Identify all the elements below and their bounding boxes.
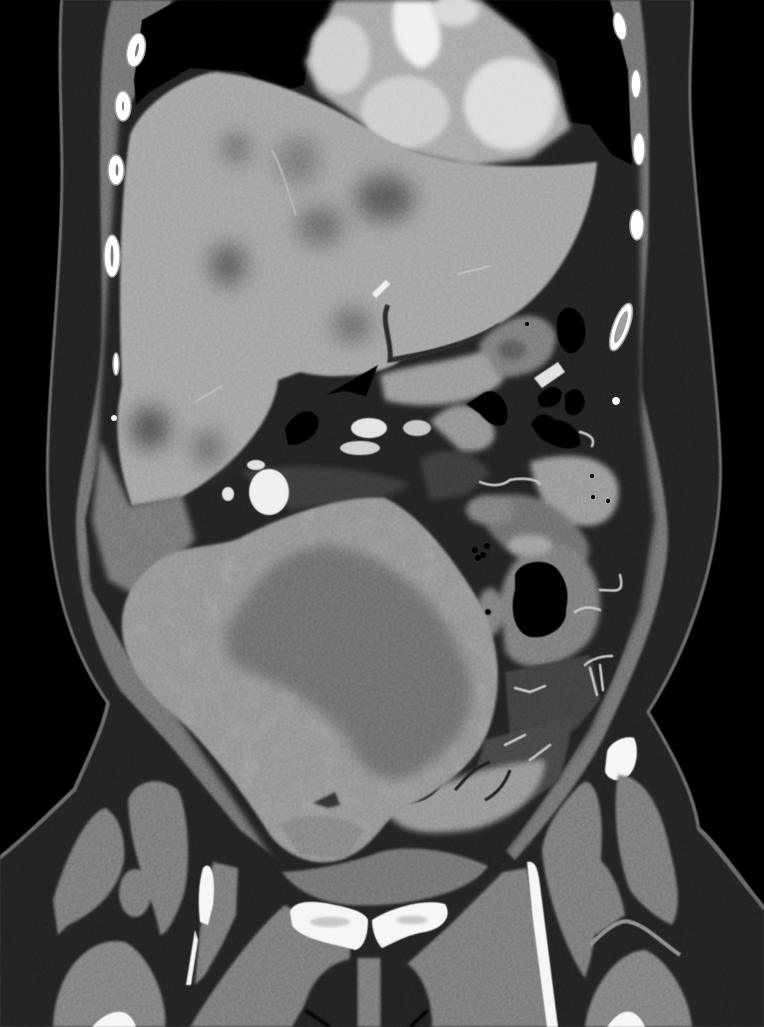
pelvic and thigh muscles — [53, 775, 692, 1027]
pelvic tumour mass — [122, 498, 498, 862]
marrow of pelvic bones — [310, 916, 428, 927]
tumour mottled rim texture — [138, 508, 498, 862]
retroperitoneal and mesenteric fat base — [90, 100, 655, 870]
lungs — [134, 0, 632, 165]
descending colon wall — [477, 535, 600, 667]
heart and great vessels — [305, 0, 570, 166]
liver fissure and vessels — [195, 150, 500, 402]
fine gas bubbles — [472, 322, 610, 561]
liver — [117, 72, 597, 506]
liver lesions — [130, 133, 415, 466]
tumour necrotic centre — [225, 545, 471, 779]
bowel gas pockets — [285, 308, 586, 637]
femoral and pelvic bones — [92, 862, 645, 1027]
arc vessel over right femur — [590, 921, 680, 955]
perirectal fat and rectum — [300, 958, 432, 1027]
bright enhancing small bowel strokes — [480, 432, 621, 760]
ribs — [104, 11, 645, 375]
lower mesenteric loops — [385, 655, 600, 833]
tumour inferior pole — [280, 792, 365, 858]
flank fluid — [92, 440, 195, 595]
small rib tips — [111, 397, 620, 421]
stomach and upper bowel loops — [240, 316, 618, 570]
contrast vessels and bright bowel content — [222, 362, 565, 515]
iliac bone crest — [605, 737, 637, 780]
fat clefts through lower bowel — [385, 760, 510, 808]
chest and abdominal wall muscle — [76, 0, 668, 865]
rib marrow centres — [110, 43, 631, 344]
bladder — [282, 849, 488, 905]
